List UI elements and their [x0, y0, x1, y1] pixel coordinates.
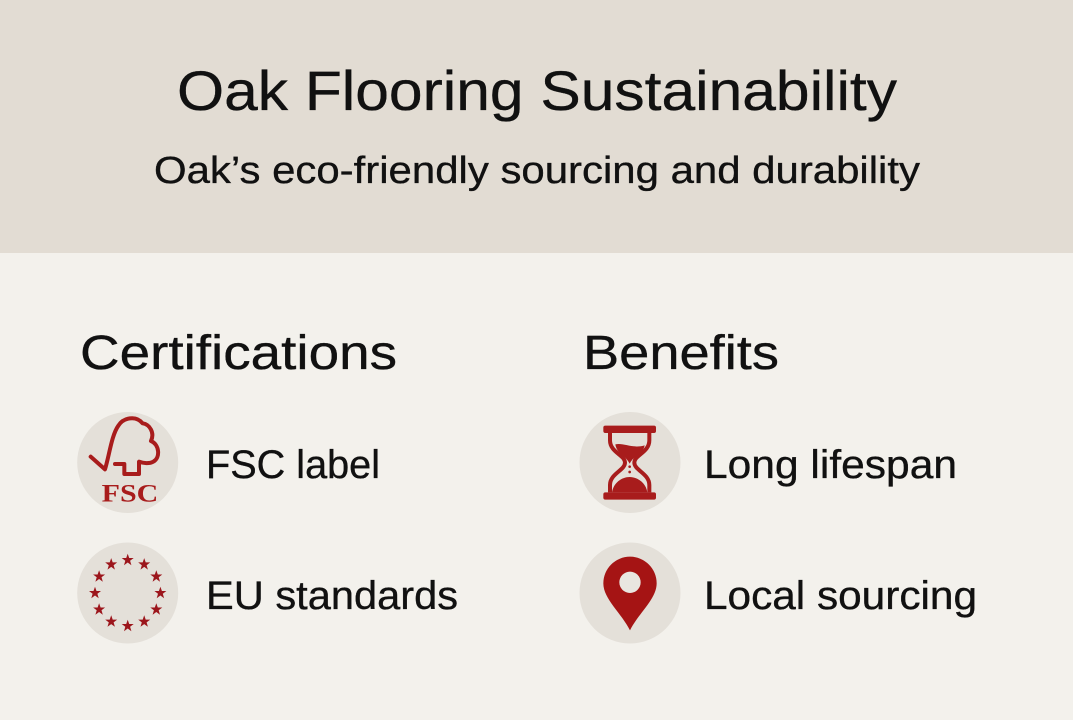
- heading: certifications: Certifications: [80, 327, 397, 380]
- label: EU standards: EU standards: [206, 574, 458, 618]
- heading: benefits: Benefits: [583, 327, 779, 380]
- icon: EU stars: [77, 542, 178, 644]
- panel: benefits: [580, 327, 977, 644]
- label: long lifespan: Long lifespan: [704, 443, 957, 487]
- panel: certifications: [77, 327, 458, 644]
- label: local sourcing: Local sourcing: [704, 574, 977, 618]
- icon: hourglass: [580, 412, 680, 513]
- label: FSC: FSC label: [206, 443, 380, 487]
- header band: [0, 0, 1073, 253]
- subtitle: Oak’s eco-friendly sourcing and durability: [154, 150, 920, 192]
- title: Oak Flooring Sustainability: [177, 59, 897, 122]
- icon: FSC logo: FSC: [102, 479, 158, 507]
- panel: header: [0, 0, 1073, 253]
- icon: map pin: [580, 542, 680, 644]
- icon: FSC logo: [77, 412, 178, 513]
